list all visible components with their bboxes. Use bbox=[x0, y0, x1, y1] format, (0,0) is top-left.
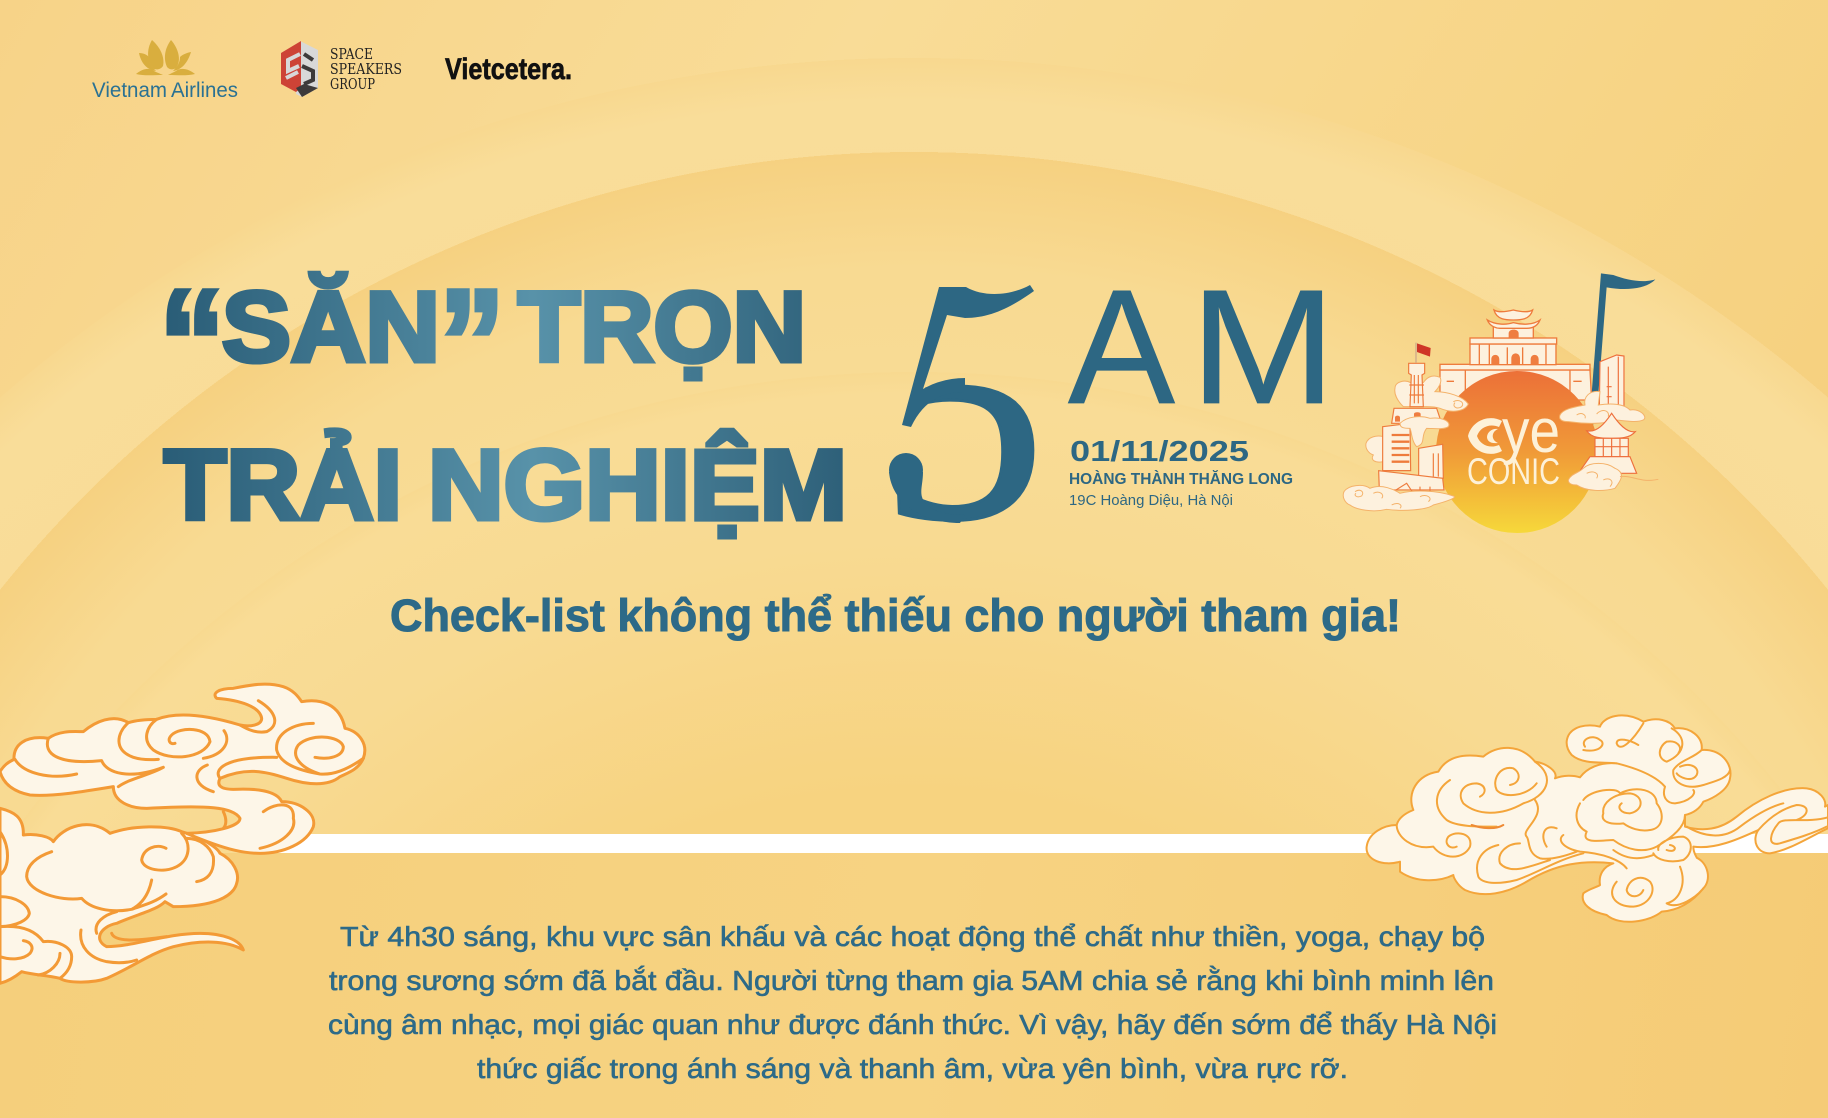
title headline: SĂN bbox=[222, 271, 440, 382]
title headline: TRỌN bbox=[518, 271, 806, 382]
big 5AM wordmark: 5 bbox=[878, 212, 1046, 591]
body paragraph: trong sương sớm đã bắt đầu. Người từng tham gia 5AM chia sẻ rằng khi bình minh lên bbox=[329, 965, 1494, 996]
title headline bbox=[159, 258, 847, 540]
logo: Eyeconic illustration bbox=[1343, 273, 1658, 533]
logo: Vietcetera: Vietcetera. bbox=[445, 53, 572, 86]
icon: citadel bbox=[1440, 310, 1592, 400]
text: eyeconic wordmark: ye bbox=[1502, 397, 1560, 466]
title headline: TRẢI bbox=[164, 429, 402, 540]
title headline: “ bbox=[159, 258, 225, 426]
event date and venue: 19C Hoàng Diệu, Hà Nội bbox=[1069, 492, 1233, 509]
logo: Vietnam Airlines: Vietnam bbox=[92, 79, 167, 102]
logo: Space Speakers Group: GROUP bbox=[330, 75, 375, 93]
logo: Vietnam Airlines: Airlines bbox=[171, 79, 238, 102]
illustration: left clouds bbox=[0, 684, 365, 983]
body paragraph: thức giấc trong ánh sáng và thanh âm, vừa yên bình, vừa rực rỡ. bbox=[477, 1053, 1348, 1084]
subtitle: Check-list không thể thiếu cho người tham gia! bbox=[390, 590, 1401, 641]
logo: Space Speakers Group: SPEAKERS bbox=[330, 60, 402, 78]
illustration: right clouds bbox=[1367, 715, 1828, 922]
logo: Vietnam Airlines bbox=[92, 40, 238, 102]
big 5AM wordmark: A bbox=[1068, 255, 1175, 438]
event date and venue: HOÀNG THÀNH THĂNG LONG bbox=[1069, 469, 1293, 488]
icon: tower and pagoda bbox=[1560, 355, 1658, 490]
event date and venue: 01/11/2025 bbox=[1070, 436, 1249, 468]
big 5AM wordmark bbox=[889, 285, 1322, 523]
event date and venue bbox=[1069, 436, 1293, 509]
icon: Hanoi flag tower bbox=[1343, 343, 1468, 511]
logo: Space Speakers Group: SPACE bbox=[330, 45, 373, 63]
logo: Space Speakers Group bbox=[281, 41, 402, 97]
title headline: NGHIỆM bbox=[428, 429, 847, 540]
icon: sun disc bbox=[1436, 371, 1598, 533]
body paragraph bbox=[328, 921, 1497, 1084]
white horizon band bbox=[240, 834, 1828, 853]
body paragraph: cùng âm nhạc, mọi giác quan như được đánh thức. Vì vậy, hãy đến sớm để thấy Hà Nội bbox=[328, 1009, 1497, 1040]
text: eyeconic wordmark bbox=[1467, 397, 1560, 492]
body paragraph: Từ 4h30 sáng, khu vực sân khấu và các hoạt động thể chất như thiền, yoga, chạy bộ bbox=[340, 921, 1485, 952]
icon: flag pole bbox=[1589, 273, 1655, 430]
title headline: ” bbox=[439, 258, 505, 426]
text: eyeconic wordmark: CONIC bbox=[1467, 451, 1560, 492]
big 5AM wordmark: M bbox=[1190, 255, 1336, 438]
